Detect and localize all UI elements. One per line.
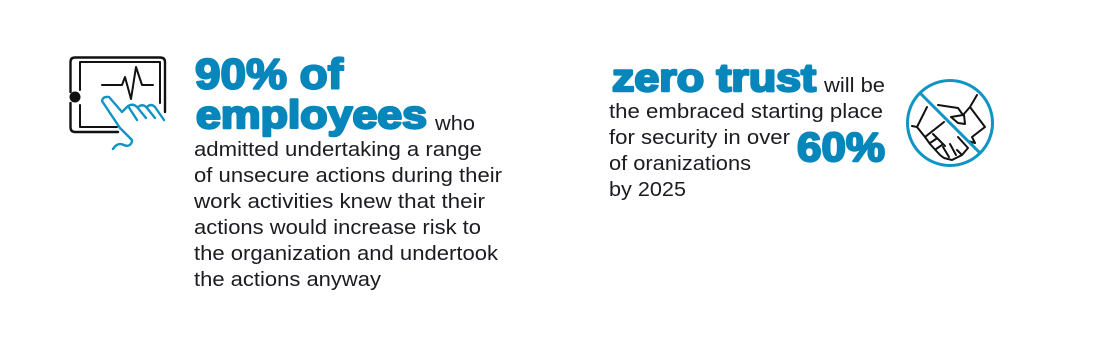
text block: employee statistic description: actions would increase risk to <box>194 217 481 239</box>
text block: employee statistic description: of unsecure actions during their <box>194 165 502 187</box>
text block: employee statistic description: who <box>434 113 475 135</box>
text block: zero trust description: for security in over <box>609 127 790 149</box>
text block: zero trust description: the embraced starting place <box>609 101 883 123</box>
text block: zero trust description: of oranizations <box>609 153 751 175</box>
heading: 90% of employees: employees <box>196 94 427 137</box>
text block: employee statistic description: the organization and undertook <box>194 243 499 265</box>
text block: zero trust description: by 2025 <box>609 179 686 201</box>
text block: employee statistic description: work activities knew that their <box>193 191 485 213</box>
heading: zero trust: zero trust <box>612 57 816 100</box>
heading: 90% of employees <box>195 50 427 137</box>
icon: tablet with touching hand <box>70 58 165 149</box>
statistic: 60%: 60% <box>797 124 885 170</box>
text block: employee statistic description: admitted undertaking a range <box>194 139 482 161</box>
text block: zero trust description: will be <box>823 75 885 97</box>
text block: zero trust description <box>609 75 885 201</box>
icon: crossed-out handshake <box>908 80 992 166</box>
text block: employee statistic description <box>193 113 502 291</box>
text block: employee statistic description: the actions anyway <box>194 269 381 291</box>
heading: 90% of employees: 90% of <box>195 50 344 98</box>
